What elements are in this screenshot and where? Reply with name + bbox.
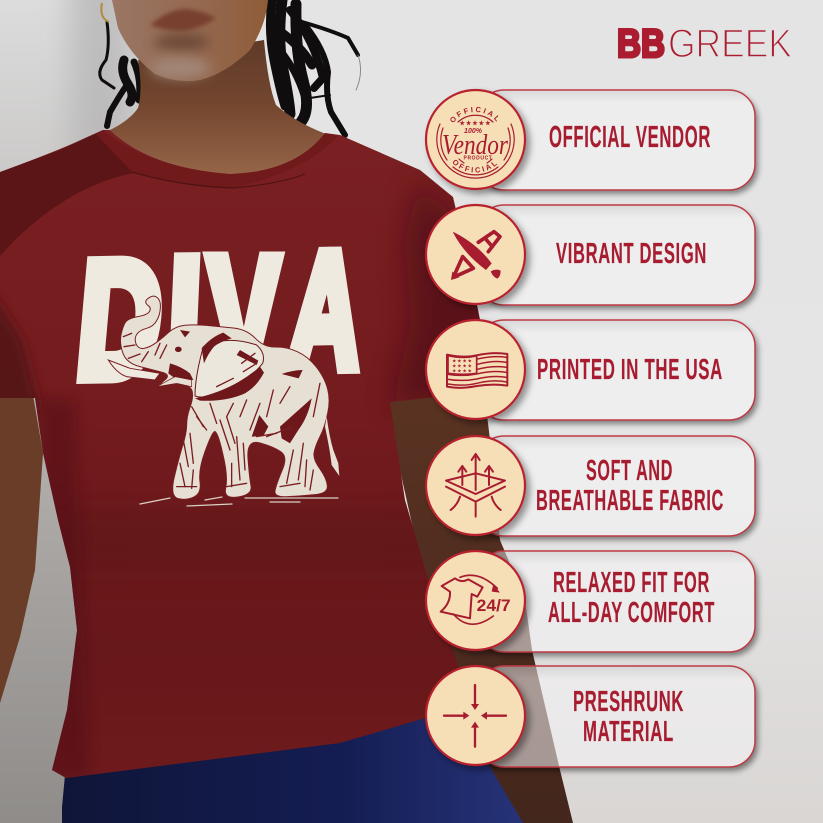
icon: vendor stamp: PRODUCT (464, 156, 492, 162)
t-shirt body (0, 130, 482, 778)
jeans (62, 695, 523, 823)
panel (478, 205, 755, 305)
panel (478, 90, 755, 190)
feature: official vendor (424, 88, 762, 198)
icon: vendor stamp: 100% (464, 128, 483, 135)
icon: t-shirt 24/7: 24/7 (477, 596, 511, 615)
word DIVA: D (71, 227, 169, 413)
lips (150, 9, 216, 31)
icon: american flag (426, 320, 525, 419)
feature: preshrunk material (426, 666, 755, 767)
label: VIBRANT DESIGN (556, 238, 707, 270)
label (536, 455, 724, 517)
word DIVA: V (208, 224, 280, 408)
person photo (0, 0, 573, 823)
label: PRESHRUNK (573, 686, 684, 718)
word DIVA: I (164, 224, 205, 409)
elephant (108, 296, 339, 499)
icon: american flag: ★★★★ (452, 368, 473, 374)
icon: vendor stamp: Vendor (442, 129, 509, 161)
shirt shading (0, 130, 500, 780)
collar band (96, 130, 338, 188)
feature: printed in the usa (426, 320, 755, 420)
left arm (0, 395, 43, 703)
icon: shrink arrows (426, 666, 525, 765)
ground strokes (140, 497, 338, 506)
panel (478, 320, 755, 420)
icon: t-shirt 24/7 (426, 551, 525, 650)
icon: american flag: ★★★★ (452, 358, 473, 364)
word DIVA: A (284, 217, 368, 403)
label: MATERIAL (583, 716, 674, 748)
label (548, 567, 715, 629)
icon: american flag: ★★★★ (452, 363, 473, 369)
feature: soft and breathable fabric (426, 436, 755, 536)
logo (617, 22, 792, 66)
icon: vendor stamp: ★★★★★ (460, 120, 491, 127)
icon: vendor stamp: OFFICIAL (453, 160, 498, 172)
icon: brush and pencil (426, 205, 525, 304)
earring (101, 3, 109, 22)
label (573, 686, 684, 748)
icon: vendor stamp: OFFICIAL (450, 106, 498, 122)
hair left (100, 22, 140, 126)
panel (478, 436, 755, 536)
logo BB mark: BB (617, 22, 665, 66)
face (112, 0, 268, 81)
label: SOFT AND (586, 455, 673, 487)
icon: breathable fabric (426, 436, 525, 535)
neck (110, 40, 326, 174)
feature: vibrant design (426, 205, 755, 305)
DIVA and elephant print (71, 217, 368, 506)
label: RELAXED FIT FOR (553, 567, 710, 599)
feature: relaxed fit (426, 551, 755, 652)
right arm (380, 380, 573, 823)
panel (478, 666, 755, 767)
hair right (270, 0, 361, 135)
chin shadow (154, 34, 210, 50)
icon: vendor stamp (424, 88, 534, 198)
chin highlight (150, 58, 210, 78)
word DIVA (71, 217, 368, 413)
collar stitch (132, 172, 305, 188)
panel (478, 551, 755, 652)
logo GREEK wordmark: GREEK (668, 22, 792, 66)
